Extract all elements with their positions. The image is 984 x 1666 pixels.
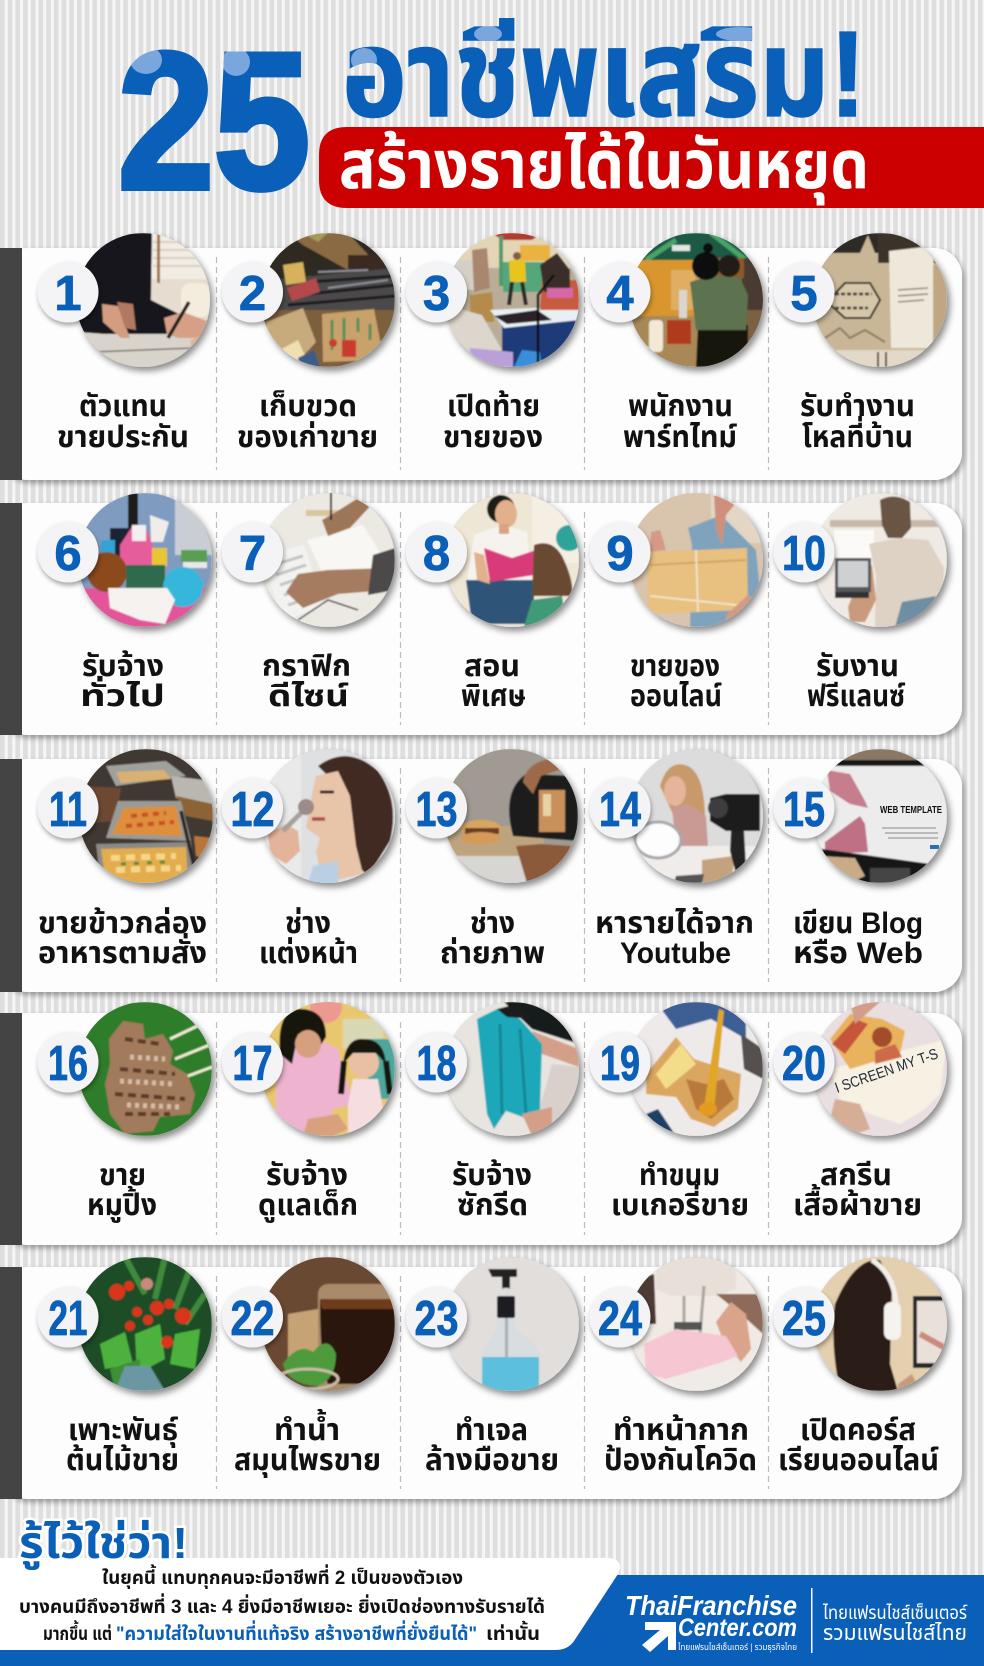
label 10: รับงาน: [816, 650, 899, 683]
item 15: [774, 749, 947, 970]
callout text line 1: ในยุคนี้ แทบทุกคนจะมีอาชีพที่ 2 เป็นของตัวเอง: [102, 1564, 463, 1589]
item 22: [222, 1257, 395, 1478]
badge number 5: 5: [790, 267, 818, 321]
item 10: [774, 493, 947, 713]
callout heading: รู้ไว้ใช่ว่า!: [19, 1519, 188, 1570]
item 8: [406, 493, 582, 713]
panel: row 3 (items 11-15): [0, 749, 962, 992]
item 19: [590, 1002, 763, 1222]
badge number 19: 19: [600, 1037, 640, 1091]
label 25: [778, 1414, 939, 1477]
label 18: รับจ้าง: [452, 1159, 532, 1192]
label 6: ทั่วไป: [80, 675, 165, 713]
photo: graphic designer hands: [261, 490, 395, 627]
badge number 1: 1: [54, 267, 82, 321]
label 19: [611, 1159, 749, 1222]
item 21: [38, 1257, 212, 1477]
logo: ThaiFranchise Center.com: ThaiFranchise: [625, 1590, 797, 1621]
label 18: ซักรีด: [457, 1189, 528, 1222]
badge number 4: 4: [606, 267, 634, 321]
badge number 24: 24: [598, 1292, 642, 1346]
badge number 17: [222, 1032, 283, 1092]
title: อาชีพเสริม: อาชีพเสริม!: [342, 6, 866, 142]
item 6: [38, 493, 212, 713]
title: 25: 25: [118, 13, 310, 230]
badge number 13: 13: [416, 783, 458, 837]
label 2: [237, 389, 378, 454]
badge number 3: [406, 262, 467, 322]
label 8: สอน: [464, 650, 520, 683]
item 17: [222, 991, 395, 1223]
photo: cleaning supplies: [78, 493, 212, 627]
badge number 11: [38, 778, 98, 838]
badge number 11: 11: [49, 783, 87, 837]
item 1: [38, 233, 211, 454]
callout: did you know: [0, 1519, 620, 1650]
photo: photographer shooting burger: [444, 749, 578, 883]
label 9: ขายของ: [630, 650, 720, 683]
label 11: ขายข้าวกล่อง: [38, 907, 207, 940]
footer tagline: [822, 1603, 968, 1645]
label 5: โหลที่บ้าน: [802, 415, 913, 454]
label 7: [262, 650, 351, 713]
label 13: [440, 907, 545, 970]
label 5: [800, 390, 915, 454]
footer blue band: [0, 1575, 984, 1666]
panel: row 4 (items 16-20): [0, 991, 962, 1245]
badge number 6: [38, 522, 98, 582]
label 11: [38, 907, 207, 970]
label 22: สมุนไพรขาย: [234, 1444, 381, 1478]
badge number 7: [222, 522, 283, 582]
label 8: [461, 650, 526, 713]
badge number 3: 3: [423, 267, 450, 321]
label 12: แต่งหน้า: [259, 937, 358, 970]
badge number 2: [222, 262, 283, 322]
label 16: หมูปิ้ง: [87, 1185, 157, 1223]
photo: web template on laptop: WEB TEMPLATE: [880, 805, 942, 816]
label 9: ออนไลน์: [630, 680, 722, 713]
badge number 21: [38, 1286, 98, 1348]
label 4: [623, 390, 737, 454]
photo: anthurium plants: [78, 1257, 212, 1391]
subtitle red banner: สร้างรายได้ในวันหยุด: [339, 127, 869, 206]
photo: grilled pork skewers: [78, 1002, 212, 1136]
logo: ThaiFranchise Center.com: [625, 1590, 797, 1652]
label 2: เก็บขวด: [259, 389, 357, 423]
item 5: [774, 233, 947, 454]
badge number 4: [590, 262, 650, 322]
photo: youtuber with camera: [629, 749, 763, 883]
item 20: [774, 1002, 947, 1222]
label 25: เรียนออนไลน์: [778, 1444, 939, 1477]
label 15: เขียน Blog: [793, 907, 923, 940]
photo: herbal drink glass: [261, 1257, 395, 1396]
callout text line 3: มากขึ้น แต่: [43, 1620, 112, 1645]
label 12: [259, 907, 358, 970]
badge number 9: 9: [606, 527, 634, 581]
label 7: ดีไซน์: [268, 680, 349, 713]
label 1: [57, 390, 189, 454]
label 5: รับทำงาน: [800, 390, 915, 423]
label 21: [66, 1414, 179, 1477]
panel: row 1 (items 1-5): [0, 233, 962, 480]
badge number 14: 14: [599, 783, 641, 837]
item 16: [38, 1002, 212, 1223]
label 13: ช่าง: [470, 907, 515, 940]
callout text line 3: [43, 1620, 540, 1645]
badge number 5: [774, 262, 834, 322]
badge number 16: [38, 1032, 98, 1092]
label 20: [793, 1159, 922, 1222]
panel: row 5 (items 21-25): [0, 1257, 962, 1499]
badge number 16: 16: [48, 1037, 88, 1091]
label 7: กราฟิก: [262, 650, 351, 683]
item 24: [590, 1257, 763, 1477]
label 17: รับจ้าง: [266, 1159, 348, 1192]
label 11: อาหารตามสั่ง: [38, 932, 207, 970]
badge number 1: [38, 262, 98, 322]
label 21: เพาะพันธุ์: [68, 1414, 178, 1448]
photo: makeup artist: [261, 749, 395, 883]
badge number 15: 15: [783, 783, 825, 837]
badge number 18: 18: [416, 1037, 456, 1091]
photo: hand gel pump bottle: [445, 1257, 579, 1391]
label 14: [595, 907, 754, 970]
label 23: ล้างมือขาย: [425, 1444, 559, 1477]
badge number 10: 10: [782, 527, 826, 581]
photo: screen printed t-shirt: [813, 1002, 947, 1136]
badge number 21: 21: [48, 1292, 88, 1346]
photo: private tutor with child: [445, 493, 582, 627]
badge number 22: 22: [230, 1292, 274, 1346]
photo: freelancer at laptop: [813, 493, 947, 627]
photo: toast with honey: [629, 1002, 763, 1136]
badge number 7: 7: [239, 527, 266, 581]
photo: recycled cardboard pile: [261, 233, 395, 367]
label 3: เปิดท้าย: [447, 390, 540, 423]
label 8: พิเศษ: [461, 680, 526, 713]
label 15: [793, 907, 923, 970]
photo: parcel box online selling: [629, 493, 763, 627]
label 3: ขายของ: [443, 421, 543, 454]
footer tagline: ไทยแฟรนไชส์เซ็นเตอร์: [822, 1603, 968, 1624]
label 21: ต้นไม้ขาย: [66, 1444, 179, 1477]
item 23: [406, 1257, 579, 1477]
label 17: ดูแลเด็ก: [258, 1188, 358, 1223]
badge number 25: 25: [782, 1292, 826, 1346]
callout text line 3: "ความใส่ใจในงานที่แท้จริง สร้างอาชีพที่ยั่งยืนได้": [116, 1620, 477, 1645]
badge number 12: 12: [230, 783, 274, 837]
item 14: [590, 749, 763, 970]
label 4: พาร์ทไทม์: [623, 421, 737, 454]
label 14: Youtube: [620, 937, 731, 970]
badge number 23: 23: [414, 1292, 458, 1346]
badge number 9: [590, 522, 650, 582]
item 7: [222, 490, 395, 713]
photo: babysitter with child: [261, 991, 395, 1136]
label 22: [234, 1408, 381, 1478]
label 18: [452, 1159, 532, 1222]
label 3: [443, 390, 543, 454]
item 25: [774, 1257, 953, 1477]
callout text line 2: บางคนมีถึงอาชีพที่ 3 และ 4 ยิ่งมีอาชีพเยอะ ยิ่งเปิดช่องทางรับรายได้: [19, 1593, 545, 1618]
badge number 2: 2: [239, 267, 266, 321]
label 24: ป้องกันโควิด: [604, 1444, 757, 1477]
photo: screen printed t-shirt: I SCREEN MY T-S: [833, 1046, 940, 1097]
item 4: [590, 233, 764, 454]
label 20: สกรีน: [820, 1159, 892, 1192]
label 23: ทำเจล: [455, 1414, 528, 1447]
item 2: [222, 233, 395, 454]
label 16: [87, 1159, 157, 1223]
badge number 6: 6: [54, 527, 82, 581]
label 22: ทำน้ำ: [274, 1408, 340, 1447]
photo: food trays: [79, 749, 213, 883]
label 24: ทำหน้ากาก: [613, 1414, 749, 1447]
item 9: [590, 493, 763, 713]
label 13: ถ่ายภาพ: [440, 937, 545, 970]
item 11: [38, 749, 213, 970]
label 9: [630, 650, 722, 713]
label 6: รับจ้าง: [82, 650, 164, 683]
badge number 8: 8: [423, 527, 450, 581]
photo: paper bags at home: [813, 233, 947, 367]
badge number 8: [406, 522, 467, 582]
label 20: เสื้อผ้าขาย: [793, 1183, 922, 1222]
item 3: [406, 233, 579, 454]
label 19: เบเกอรี่ขาย: [611, 1183, 749, 1222]
icon: logo arrow: [642, 1622, 676, 1652]
label 1: ขายประกัน: [57, 421, 189, 454]
photo: online course with headphones: [813, 1257, 953, 1391]
label 24: [604, 1414, 757, 1477]
badge number 17: 17: [232, 1037, 272, 1091]
title gloss highlights: [130, 26, 764, 76]
badge number 18: [406, 1032, 467, 1092]
label 1: ตัวแทน: [79, 390, 167, 423]
label 23: [425, 1414, 559, 1477]
label 19: ทำขนม: [639, 1159, 720, 1192]
photo: part-time cafe worker: [629, 233, 764, 367]
logo: ThaiFranchise Center.com: ไทยแฟรนไชส์เซ็นเตอร์ | รวมธุรกิจไทย: [677, 1642, 797, 1652]
badge number 20: 20: [782, 1037, 826, 1091]
item 12: [222, 749, 395, 970]
label 12: ช่าง: [285, 907, 331, 940]
label 6: [80, 650, 165, 713]
label 14: หารายได้จาก: [595, 907, 754, 940]
item 13: [406, 749, 578, 970]
label 16: ขาย: [99, 1159, 146, 1192]
photo: sewing a face mask: [629, 1257, 763, 1391]
photo: web template on laptop: [813, 749, 947, 883]
label 10: [807, 650, 906, 713]
logo: ThaiFranchise Center.com: Center.com: [678, 1614, 797, 1642]
badge number 19: [590, 1032, 650, 1092]
label 17: [258, 1159, 358, 1223]
label 10: ฟรีแลนซ์: [807, 680, 906, 713]
footer tagline: รวมแฟรนไชส์ไทย: [823, 1622, 967, 1645]
label 2: ของเก่าขาย: [237, 421, 378, 454]
photo: night market stall: [445, 233, 579, 367]
photo: laundry teal cloth: [445, 1002, 579, 1136]
panel: row 2 (items 6-10): [0, 490, 962, 735]
label 15: หรือ Web: [793, 937, 923, 970]
photo: signing document: [76, 233, 211, 367]
item 18: [406, 1002, 579, 1222]
callout text line 3: เท่านั้น: [486, 1621, 540, 1645]
label 25: เปิดคอร์ส: [800, 1414, 916, 1447]
label 4: พนักงาน: [628, 390, 733, 423]
